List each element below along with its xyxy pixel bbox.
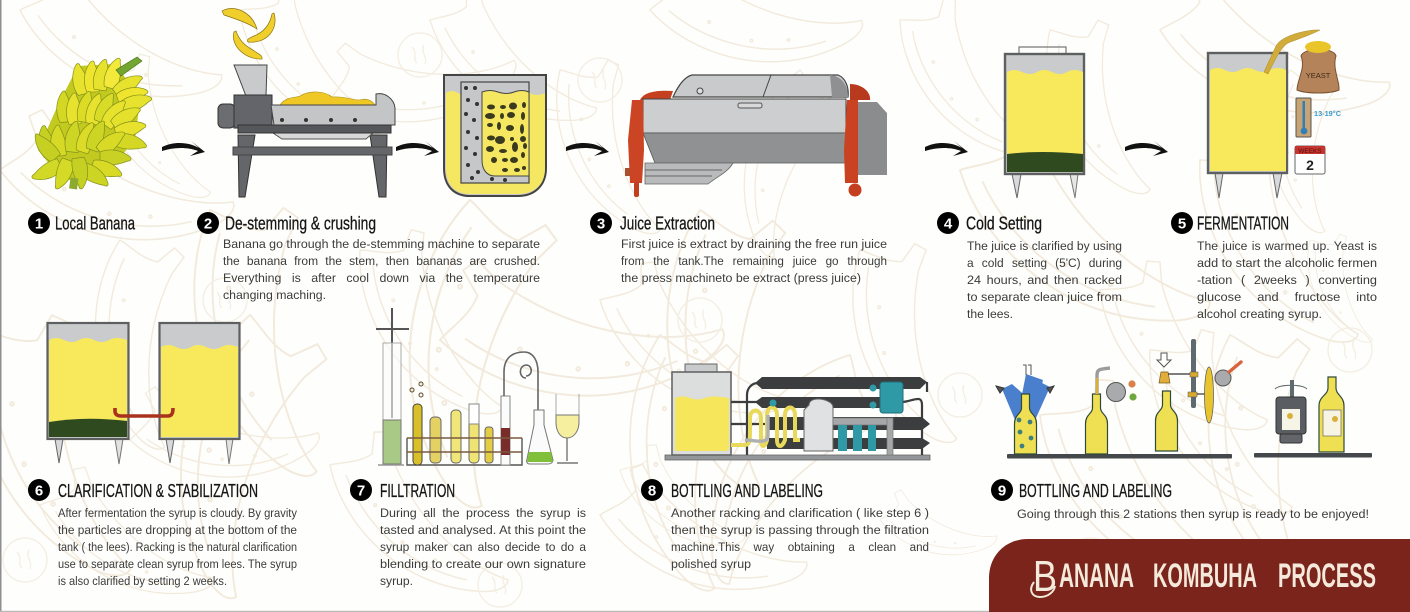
icon: yeast pour — [1264, 30, 1320, 74]
title banner: B — [1033, 552, 1057, 601]
heading: filltration: FILLTRATION — [380, 480, 455, 501]
icon: calendar 2 weeks: 2 — [1306, 157, 1314, 173]
number badge 5: 5 — [1178, 216, 1186, 232]
text block: step 6: tank ( the lees). Racking is the natural clarification — [58, 540, 297, 554]
text block: step 4 — [967, 239, 1122, 321]
number badge 3: 3 — [597, 216, 605, 232]
number badge 5 — [1171, 212, 1193, 234]
icon: fermentation tank — [1208, 53, 1287, 198]
icon: yeast sack: YEAST — [1306, 71, 1331, 80]
text block: step 4: 24 hours, and then racked — [967, 273, 1122, 287]
text block: step 6: After fermentation the syrup is cloudy. By gravity — [58, 506, 298, 520]
heading: de-stemming and crushing: De-stemming & crushing — [225, 212, 376, 234]
number badge 3 — [590, 212, 612, 234]
number badge 7 — [350, 479, 372, 501]
text block: step 7: tasted and analysed. At this point the — [380, 523, 586, 537]
text block: step 3: First juice is extract by draining the free run juice — [621, 237, 887, 251]
text block: step 8: polished syrup — [671, 557, 751, 571]
text block: step 4: to separate clean juice from — [967, 290, 1122, 304]
number badge 1: 1 — [35, 216, 43, 232]
number badge 4 — [937, 212, 959, 234]
text block: step 5: alcohol creating syrup. — [1197, 307, 1322, 321]
icon: rinsing bottling filling line — [996, 339, 1372, 458]
text block: step 8 — [671, 506, 929, 571]
panel: step 4 cold setting — [937, 47, 1122, 321]
icon: thermometer: 13-19°C — [1314, 110, 1341, 118]
text block: step 5: glucose and fructose into — [1197, 290, 1377, 304]
text block: step 4: The juice is clarified by using — [967, 239, 1122, 253]
text block: step 5: The juice is warmed up. Yeast is — [1197, 239, 1377, 253]
number badge 8: 8 — [648, 482, 656, 500]
arrow 2 to press tank — [396, 141, 439, 156]
text block: step 2 — [223, 237, 540, 302]
text block: step 6 — [58, 506, 298, 588]
panel: step 6 clarification and stabilization — [28, 323, 298, 588]
text block: step 5: add to start the alcoholic fermen — [1197, 256, 1377, 270]
number badge 9 — [991, 479, 1013, 501]
arrow 3 to press — [566, 141, 609, 156]
number badge 7: 7 — [357, 482, 365, 500]
text block: step 5: -tation ( 2weeks ) converting — [1197, 273, 1377, 287]
panel: step 9 bottling and labeling — [991, 339, 1372, 521]
icon: thermometer — [1296, 98, 1341, 137]
text block: step 7: syrup maker can also decide to do a — [380, 540, 586, 554]
icon: crushing tank — [444, 75, 546, 196]
text block: step 8: then the syrup is passing through the filtration — [671, 523, 929, 537]
number badge 4: 4 — [944, 216, 953, 232]
text block: step 6: the particles are dropping at the bottom of the — [58, 523, 297, 537]
icon: calendar 2 weeks — [1295, 146, 1325, 174]
arrow 4 to cold setting — [925, 141, 968, 156]
icon: two racking tanks — [48, 323, 240, 464]
text block: step 7: During all the process the syrup is — [380, 506, 586, 520]
panel: step 1 local banana — [28, 56, 154, 234]
text block: step 2: changing maching. — [223, 288, 326, 302]
number badge 1 — [28, 212, 50, 234]
number badge 8 — [641, 479, 663, 501]
number badge 6 — [28, 479, 50, 501]
icon: banana bunch — [29, 56, 154, 192]
heading: juice extraction: Juice Extraction — [620, 212, 715, 234]
panel: step 7 filtration — [350, 308, 586, 588]
heading: bottling and labeling: BOTTLING AND LABELING — [671, 480, 823, 501]
text block: step 3: from the tank.The remaining juice go through — [621, 254, 887, 268]
text block: step 6: use to separate clean syrup from lees. The syrup — [58, 557, 297, 571]
icon: yeast sack — [1297, 41, 1339, 93]
text block: step 7 — [380, 506, 586, 588]
title banner — [989, 539, 1410, 612]
icon: de-stemming machine — [218, 65, 395, 197]
heading: bottling and labeling: BOTTLING AND LABELING — [1019, 480, 1172, 501]
icon: tank with lees — [1005, 47, 1084, 198]
heading: clarification and stabilization: CLARIFICATION & STABILIZATION — [58, 480, 258, 501]
panel: step 2 de-stemming and crushing — [197, 8, 540, 302]
icon: filtration machine — [665, 364, 930, 460]
panel: step 3 juice extraction — [590, 75, 887, 285]
text block: step 4: the lees. — [967, 307, 1013, 321]
heading: local banana: Local Banana — [55, 212, 135, 234]
title banner: ANANA — [1059, 557, 1134, 595]
text block: step 4: a cold setting (5'C) during — [967, 256, 1122, 270]
arrow 5 to fermentation — [1125, 141, 1168, 156]
text block: step 9: Going through this 2 stations then syrup is ready to be enjoyed! — [1017, 507, 1369, 521]
text block: step 6: is also clarified by setting 2 weeks. — [58, 574, 227, 588]
number badge 2 — [197, 212, 219, 234]
icon: laboratory glassware — [376, 308, 579, 465]
panel: step 8 filtration machine — [641, 364, 930, 571]
text block: step 2: Banana go through the de-stemming machine to separate — [223, 237, 540, 251]
text block: step 8: machine.This way obtaining a clean and — [671, 540, 929, 554]
icon: falling bananas — [222, 8, 275, 59]
text block: step 3 — [621, 237, 887, 285]
number badge 9: 9 — [998, 482, 1006, 500]
heading: fermentation: FERMENTATION — [1197, 212, 1289, 234]
number badge 2: 2 — [204, 216, 212, 232]
text block: step 7: syrup. — [380, 574, 413, 588]
number badge 6: 6 — [35, 482, 43, 500]
icon: press machine — [625, 75, 887, 197]
panel: step 5 fermentation — [1171, 30, 1377, 321]
text block: step 5 — [1197, 239, 1377, 321]
text block: step 2: Everything is after cool down via the temperature — [223, 271, 540, 285]
text block: step 2: the banana from the stem, then bananas are crushed. — [223, 254, 540, 268]
text block: step 7: blending to create our own signature — [380, 557, 586, 571]
title banner: KOMBUHA — [1153, 557, 1257, 595]
icon: calendar 2 weeks: WEEKS — [1298, 148, 1322, 155]
arrow 1 to 2 — [162, 141, 205, 156]
text block: step 3: the press machineto be extract (press juice) — [621, 271, 861, 285]
heading: cold setting: Cold Setting — [966, 212, 1042, 234]
text block: step 8: Another racking and clarification ( like step 6 ) — [671, 506, 929, 520]
